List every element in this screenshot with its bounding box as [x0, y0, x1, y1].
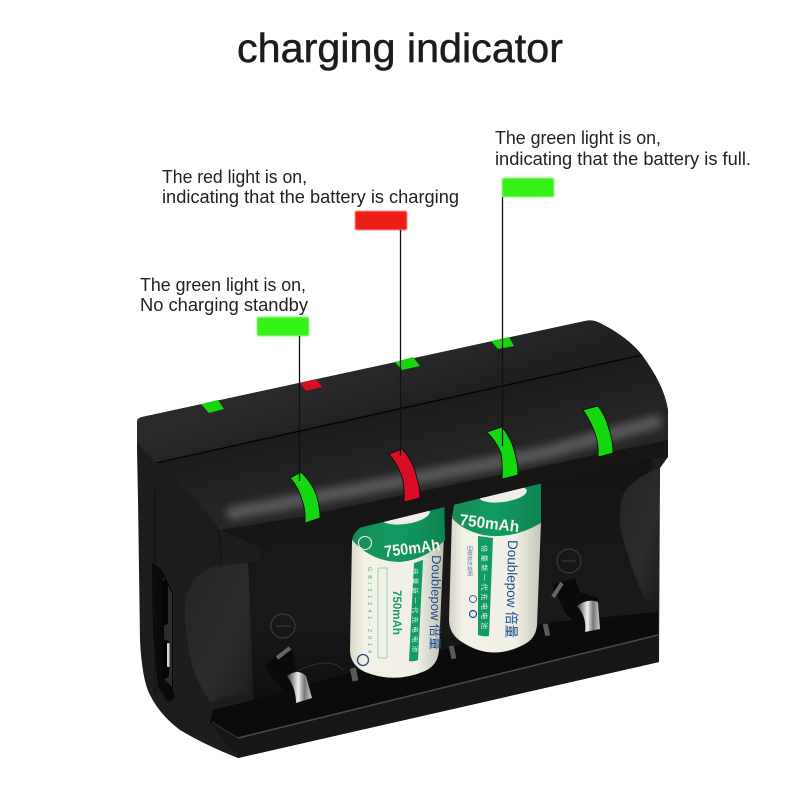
leader line: full: [502, 197, 504, 446]
charger body silhouette: [137, 320, 668, 758]
spec text: GB/31241-2014: [366, 567, 372, 653]
top terminal: [478, 483, 528, 505]
floor shelf: [210, 612, 658, 738]
indicator: green swatch: [257, 317, 309, 336]
capacity: 750mAh: [459, 512, 520, 536]
top terminal: [379, 503, 431, 527]
front indicator: 3 green: [487, 427, 518, 479]
stripe text: 倍量新一代充电电池: [411, 568, 420, 652]
green stripe: [409, 560, 423, 661]
battery: left: [350, 490, 445, 678]
seam: [156, 355, 642, 463]
brand: Doublepow 倍量: [503, 540, 521, 638]
port: micro usb: [162, 640, 169, 678]
model: 750mAh: [390, 590, 404, 635]
left shoulder edges: [155, 490, 221, 695]
label: full text: indicating that the battery is full.: [495, 148, 751, 169]
disposal icon: [470, 610, 476, 618]
minus marks: [271, 549, 581, 638]
top face: [137, 320, 642, 463]
contact: right: [552, 578, 600, 632]
charger: [137, 320, 668, 758]
top indicator: 3 green: [395, 357, 420, 370]
left arch: [185, 563, 253, 702]
capacity: 750mAh: [383, 537, 441, 561]
title: charging indicator: [237, 25, 563, 71]
callout: no charging standby: [140, 274, 309, 336]
front indicator: 1 green: [290, 472, 320, 523]
green cap: [352, 490, 445, 562]
label: standby text: The green light is on,: [140, 274, 306, 295]
label: standby text: No charging standby: [140, 294, 309, 315]
spec box: [378, 568, 387, 658]
front band: [156, 355, 668, 547]
leader line: standby: [298, 336, 300, 481]
recycle icon: [470, 596, 476, 602]
top indicator: 1 green: [201, 400, 224, 413]
callout: charging: [162, 166, 459, 230]
cavity back wall: [210, 458, 658, 738]
base front lip: [210, 635, 659, 758]
label: charging text: The red light is on,: [162, 166, 307, 187]
green stripe: [478, 536, 493, 636]
front indicator: 2 red: [389, 449, 420, 502]
front indicator: 4 green: [583, 406, 613, 457]
small terminals: [350, 624, 550, 681]
label: charging text: indicating that the battery is charging: [162, 186, 459, 207]
leader line: charging: [400, 230, 402, 456]
port: usb-c: [162, 580, 168, 625]
battery: right: [449, 465, 541, 653]
side panel with ports: [152, 563, 175, 702]
band sheen: [233, 422, 655, 513]
right arch: [620, 468, 660, 600]
cert icon: [358, 654, 368, 666]
callout: full: [495, 127, 751, 197]
top indicator: 4 green: [491, 337, 514, 349]
indicator: green swatch: [502, 178, 554, 197]
battery body: [449, 516, 541, 653]
band underside: [220, 440, 668, 547]
brand: Doublepow 倍量: [427, 555, 444, 650]
indicator: red swatch: [355, 211, 407, 230]
green cap: [452, 465, 541, 536]
top indicator: 2 red: [300, 379, 322, 391]
label: full text: The green light is on,: [495, 127, 661, 148]
stripe text: 倍量新一代充电电池: [480, 545, 489, 629]
small print: 回收标志说明: [466, 546, 473, 576]
contact: left: [265, 648, 343, 703]
plus icon: [358, 536, 372, 550]
battery body: [350, 535, 444, 678]
